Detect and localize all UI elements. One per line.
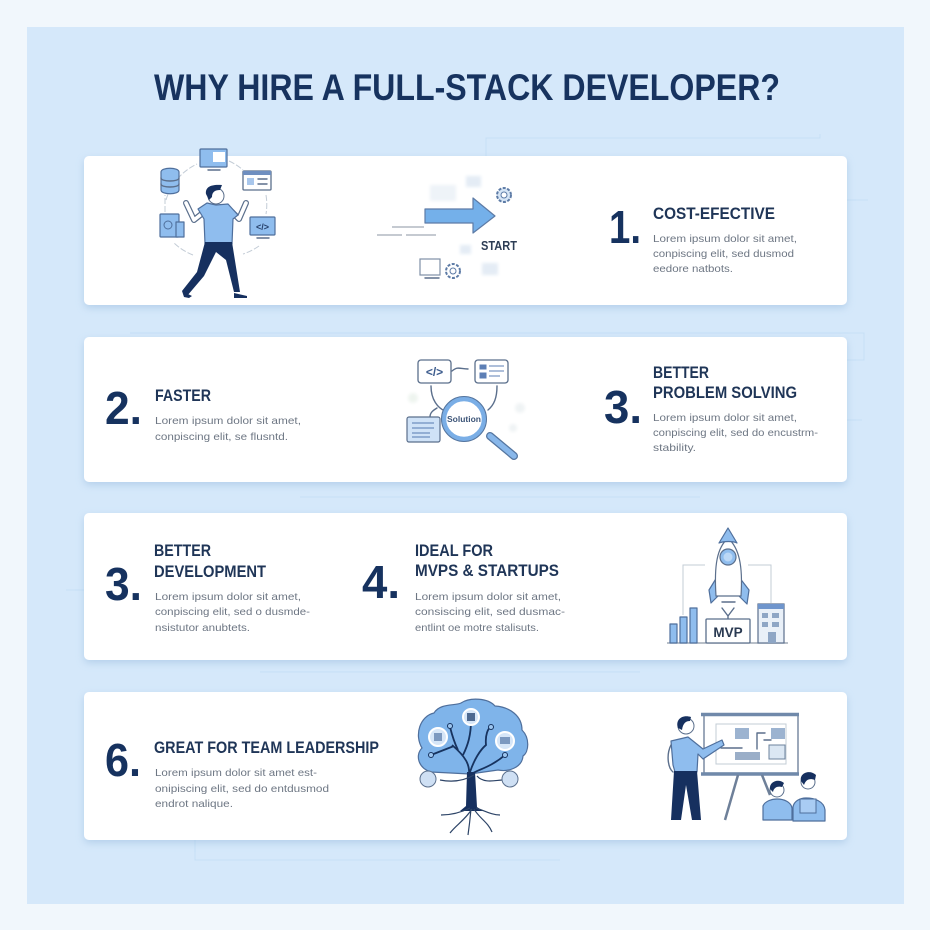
item 2 body: conpiscing elit, se flusntd. — [155, 431, 288, 443]
illustration: presenter at board — [668, 714, 825, 821]
panel: card 3 — [84, 513, 847, 660]
item 1 body: eedore natbots. — [653, 263, 733, 275]
figure legs — [182, 242, 240, 296]
figure torso — [198, 203, 238, 244]
item 3 number: 3. — [604, 381, 642, 433]
item 3 body: conpiscing elit, sed do encustrm- — [653, 427, 819, 439]
item 6 heading: GREAT FOR TEAM LEADERSHIP — [154, 738, 379, 757]
better development heading — [154, 541, 267, 581]
item 4 number: 4. — [362, 556, 400, 608]
item 4 body: entlint oe motre stalisuts. — [415, 622, 539, 634]
item 4 heading — [415, 541, 559, 580]
label: solution: Solution — [447, 414, 481, 424]
item 3 body — [653, 412, 819, 454]
better development body: Lorem ipsum dolor sit amet, — [155, 591, 301, 603]
better development heading: DEVELOPMENT — [154, 562, 267, 581]
illustration: MVP rocket — [667, 528, 788, 643]
figure arms — [186, 203, 246, 220]
item 3 body: Lorem ipsum dolor sit amet, — [653, 412, 797, 424]
illustration: start arrow — [377, 176, 517, 278]
better development body — [155, 591, 311, 634]
item 2 number: 2. — [105, 382, 142, 434]
item 6 number: 6. — [105, 734, 141, 786]
item 1 body: conpiscing elit, sed dusmod — [653, 248, 794, 260]
item 6 body: onipiscing elit, sed do entdusmod — [155, 783, 329, 795]
illustration: technology tree — [418, 699, 528, 835]
item 1 body: Lorem ipsum dolor sit amet, — [653, 233, 797, 245]
item 6 body — [155, 767, 329, 810]
better development body: nsistutor anubtets. — [155, 622, 250, 634]
item 4 body: Lorem ipsum dolor sit amet, — [415, 591, 561, 603]
item 3 heading: PROBLEM SOLVING — [653, 383, 797, 402]
panel: card 1 — [84, 149, 847, 305]
label: MVP: MVP — [713, 625, 743, 640]
item 6 body: endrot nalique. — [155, 798, 233, 810]
figure head — [208, 188, 224, 204]
item 2 body — [155, 415, 301, 443]
panel: card 2 — [84, 337, 847, 482]
item 2 body: Lorem ipsum dolor sit amet, — [155, 415, 301, 427]
illustration: solution magnifier — [407, 360, 525, 456]
item 4 heading: IDEAL FOR — [415, 541, 493, 560]
illustration: solution magnifier: </> — [426, 365, 443, 379]
item 4 body — [415, 591, 566, 634]
item 2 heading: FASTER — [155, 386, 211, 405]
illustration: developer juggling technologies: </> — [256, 222, 269, 232]
label: start: START — [481, 239, 517, 253]
item 3 heading — [653, 363, 797, 402]
item 4 body: consiscing elit, sed dusmac- — [415, 606, 566, 618]
better development body: conpiscing elit, sed o dusmde- — [155, 606, 311, 618]
item 4 heading: MVPS & STARTUPS — [415, 561, 559, 580]
item 1 body — [653, 233, 797, 275]
panel: card 4 — [84, 692, 847, 840]
item 3 body: stability. — [653, 442, 696, 454]
title: WHY HIRE A FULL-STACK DEVELOPER? — [154, 67, 780, 108]
item 1 heading: COST-EFECTIVE — [653, 204, 775, 223]
item 1 number: 1. — [609, 201, 641, 253]
illustration: developer juggling technologies — [160, 149, 275, 298]
item 3 number (left): 3. — [105, 558, 142, 610]
item 3 heading: BETTER — [653, 363, 709, 382]
item 6 body: Lorem ipsum dolor sit amet est- — [155, 767, 318, 779]
better development heading: BETTER — [154, 541, 211, 560]
